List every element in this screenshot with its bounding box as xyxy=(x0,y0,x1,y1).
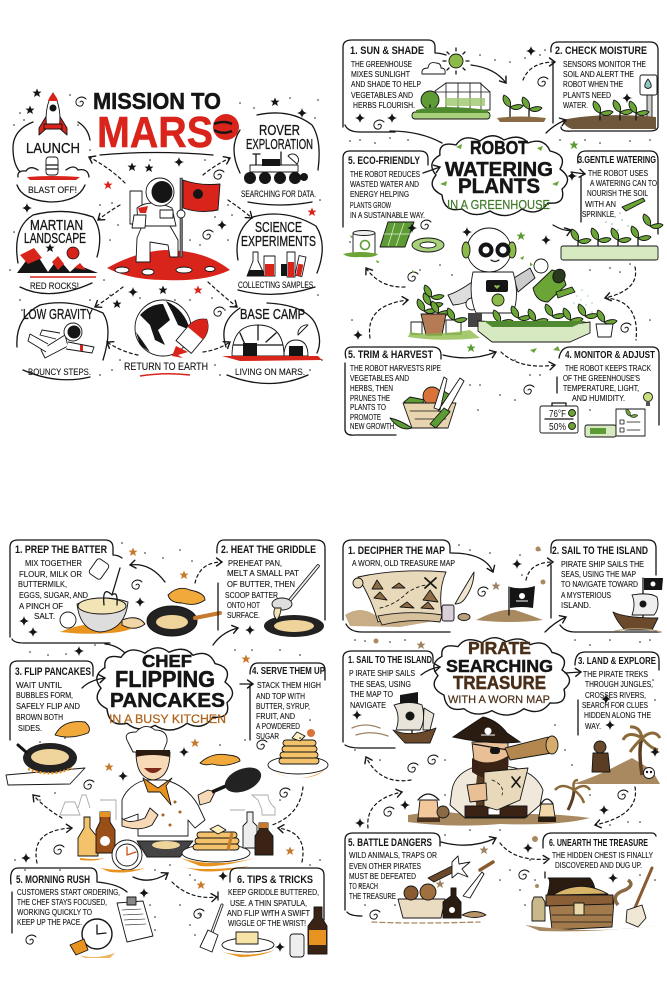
box: 2 heat the griddle: OF BUTTER, THEN xyxy=(227,579,295,589)
title: chef flipping pancakes xyxy=(97,648,233,730)
title: robot watering plants: IN A GREENHOUSE xyxy=(447,198,550,212)
box: 1 decipher the map: 1. DECIPHER THE MAP xyxy=(348,545,445,557)
box: 3 flip pancakes xyxy=(10,661,93,740)
box: 4 serve them up: FRUIT, AND xyxy=(256,711,295,721)
icon: battle items xyxy=(372,856,493,923)
box: 5 eco-friendly xyxy=(343,151,428,227)
icon: order clipboard and clock xyxy=(70,897,153,958)
label: low gravity: BOUNCY STEPS. xyxy=(28,367,91,378)
box: 4 serve them up: AND TOP WITH xyxy=(256,691,305,701)
icon: monitor devices xyxy=(540,392,652,437)
box: 2 sail to the island: TO NAVIGATE TOWARD xyxy=(561,579,638,589)
icon: dome base xyxy=(222,325,322,361)
box: 1 prep the batter: EGGS, SUGAR, AND xyxy=(19,590,88,600)
label: base camp: BASE CAMP xyxy=(240,307,305,323)
title: mission to mars: MISSION TO xyxy=(93,88,221,114)
label: launch: BLAST OFF! xyxy=(28,185,77,196)
box: 2 heat the griddle: ONTO HOT xyxy=(227,600,260,610)
title: chef flipping pancakes: FLIPPING xyxy=(115,666,215,692)
box: 3 land and explore: THE PIRATE TREKS xyxy=(583,669,648,679)
box: 2 check moisture: WATER. xyxy=(563,100,588,110)
title: chef flipping pancakes: IN A BUSY KITCHEN xyxy=(109,714,226,726)
box: 5 morning rush xyxy=(11,868,127,933)
box: 3 land and explore: HIDDEN ALONG THE xyxy=(584,710,651,720)
box: 1 sun and shade: HERBS FLOURISH. xyxy=(353,100,415,110)
arrows: pancake flow xyxy=(33,562,303,897)
icon: frying pan with pancake xyxy=(147,606,220,636)
box: 5 eco-friendly: PLANTS GROW xyxy=(350,200,391,210)
panel: pirate searching treasure xyxy=(343,540,663,931)
icon: eco items xyxy=(343,222,444,257)
box: 3 gentle watering xyxy=(578,151,658,234)
box: 1 sun and shade: THE GREENHOUSE xyxy=(351,59,412,69)
box: 5 battle dangers: 5. BATTLE DANGERS xyxy=(348,837,432,849)
box: 5 eco-friendly: 5. ECO-FRIENDLY xyxy=(348,155,420,167)
icon: red mountains xyxy=(17,247,98,277)
box: 3 flip pancakes: BUBBLES FORM, xyxy=(16,690,73,700)
icon: pirate ship top xyxy=(613,578,663,632)
label: rover exploration: SEARCHING FOR DATA. xyxy=(241,189,316,200)
box: 5 trim and harvest xyxy=(345,347,441,435)
box: 6 tips and tricks: 6. TIPS & TRICKS xyxy=(237,874,313,886)
box: 1 decipher the map: A WORN, OLD TREASURE MAP xyxy=(352,558,455,568)
box: 2 check moisture: SOIL AND ALERT THE xyxy=(563,69,634,79)
label: science experiments xyxy=(237,214,322,294)
box: 4 monitor and adjust: AND HUMIDITY. xyxy=(572,393,625,403)
box: 6 tips and tricks: KEEP GRIDDLE BUTTERED, xyxy=(228,887,319,897)
icon: rocket xyxy=(39,93,67,135)
icon: rover xyxy=(244,152,308,184)
box: 1 sail to the island: THE SEAS, USING xyxy=(350,679,411,689)
title: pirate searching treasure: TREASURE xyxy=(453,673,546,693)
icon: seedlings xyxy=(497,95,546,122)
box: 2 heat the griddle xyxy=(217,540,325,630)
title: pirate searching treasure: WITH A WORN MAP xyxy=(448,694,550,706)
box: 1 sun and shade: AND SHADE TO HELP xyxy=(351,79,421,89)
icon: potted plants xyxy=(408,285,617,340)
box: 5 eco-friendly: ENERGY HELPING xyxy=(350,189,409,199)
box: 1 sail to the island: THE MAP TO xyxy=(350,689,393,699)
icon: background bottles xyxy=(60,795,275,820)
panel: chef flipping pancakes xyxy=(6,540,328,958)
icon: treasure map xyxy=(345,571,474,627)
icon: harvest basket and shears xyxy=(390,377,464,429)
icon: top planter xyxy=(561,198,663,260)
box: 1 prep the batter: BUTTERMILK, xyxy=(18,579,67,589)
box: 4 monitor and adjust xyxy=(557,347,659,425)
icon: bottles and timer xyxy=(78,812,273,872)
box: 1 decipher the map xyxy=(343,540,455,632)
box: 2 heat the griddle: 2. HEAT THE GRIDDLE xyxy=(221,544,316,556)
icon: launch pad xyxy=(18,157,89,180)
label: launch xyxy=(13,122,90,202)
box: 2 heat the griddle: PREHEAT PAN, xyxy=(228,558,282,568)
box: 6 tips and tricks: WIGGLE OF THE WRIST! xyxy=(228,918,306,928)
box: 6 tips and tricks: AND FLIP WITH A SWIFT xyxy=(227,908,310,918)
box: 2 sail to the island: ISLAND. xyxy=(561,600,591,610)
box: 5 trim and harvest: 5. TRIM & HARVEST xyxy=(348,349,433,361)
box: 2 check moisture: 2. CHECK MOISTURE xyxy=(555,45,647,57)
box: 1 prep the batter: MIX TOGETHER xyxy=(25,558,82,568)
box: 5 battle dangers: THE TREASURE xyxy=(349,891,396,901)
title: robot watering plants: WATERING xyxy=(445,159,553,181)
box: 1 prep the batter: 1. PREP THE BATTER xyxy=(15,544,107,556)
box: 5 morning rush: CUSTOMERS START ORDERING, xyxy=(17,887,120,897)
icon: floating astronaut xyxy=(28,323,94,358)
box: 5 trim and harvest: HERBS, THEN xyxy=(350,383,393,393)
box: 3 flip pancakes: 3. FLIP PANCAKES xyxy=(15,666,91,678)
label: science experiments: COLLECTING SAMPLES. xyxy=(238,280,315,291)
box: 5 morning rush: 5. MORNING RUSH xyxy=(16,874,90,886)
icon: griddle and ladle xyxy=(264,566,324,637)
box: 3 flip pancakes: WAIT UNTIL xyxy=(16,680,62,690)
title: chef flipping pancakes: CHEF xyxy=(142,651,192,671)
box: 5 battle dangers xyxy=(345,833,440,916)
arrows: mars flow xyxy=(89,157,252,355)
box: 5 battle dangers: WILD ANIMALS, TRAPS OR xyxy=(349,850,437,860)
title: robot watering plants: ROBOT xyxy=(470,137,529,158)
title: pirate searching treasure: SEARCHING xyxy=(446,656,553,676)
box: 2 check moisture: ROBOT WHEN THE xyxy=(563,79,623,89)
box: 4 serve them up: 4. SERVE THEM UP xyxy=(252,665,325,677)
icon: pirate flag on beach xyxy=(476,586,543,622)
box: 6 tips and tricks xyxy=(218,868,324,928)
label: martian landscape: RED ROCKS! xyxy=(30,281,79,292)
box: 1 sun and shade: VEGETABLES AND xyxy=(351,90,413,100)
title: chef flipping pancakes: PANCAKES xyxy=(110,690,225,712)
box: 1 sail to the island: 1. SAIL TO THE ISLAND xyxy=(348,654,432,666)
label: launch: LAUNCH xyxy=(26,141,80,157)
box: 5 battle dangers: EVEN OTHER PIRATES xyxy=(349,861,421,871)
box: 4 serve them up: BUTTER, SYRUP, xyxy=(256,701,310,711)
box: 3 land and explore: WAY. xyxy=(585,721,601,731)
box: 2 check moisture xyxy=(551,42,658,131)
icon: griddle and pancake stack xyxy=(137,825,255,866)
title: robot watering plants xyxy=(432,136,568,216)
box: 6 unearth the treasure xyxy=(543,833,656,878)
icon: watering can xyxy=(533,267,592,314)
box: 1 sail to the island xyxy=(343,651,433,748)
box: 1 sail to the island: P IRATE SHIP SAILS xyxy=(349,668,415,678)
box: 1 sun and shade: 1. SUN & SHADE xyxy=(350,45,424,57)
box: 5 battle dangers: MUST BE DEFEATED xyxy=(349,871,416,881)
icon: chef xyxy=(122,726,215,836)
label: base camp: LIVING ON MARS. xyxy=(235,367,305,378)
title: pirate searching treasure xyxy=(434,638,570,715)
box: 5 morning rush: KEEP UP THE PACE. xyxy=(17,917,82,927)
title: robot watering plants: PLANTS xyxy=(458,175,540,198)
label: science experiments: EXPERIMENTS xyxy=(241,234,316,250)
box: 1 prep the batter xyxy=(10,540,128,656)
label: low gravity xyxy=(17,303,108,380)
box: 3 flip pancakes: SIDES. xyxy=(18,723,42,733)
icon: planet mars xyxy=(213,114,239,140)
box: 5 trim and harvest: VEGETABLES AND xyxy=(350,373,409,383)
box: 5 battle dangers: TO REACH xyxy=(349,881,378,891)
box: 5 eco-friendly: THE ROBOT REDUCES xyxy=(350,169,420,179)
title: mission to mars: MARS xyxy=(97,108,213,157)
box: 5 trim and harvest: NEW GROWTH. xyxy=(350,421,396,431)
box: 3 land and explore: SEARCH FOR CLUES xyxy=(582,700,648,710)
box: 1 sail to the island: NAVIGATE xyxy=(350,700,386,710)
box: 4 serve them up xyxy=(250,663,325,741)
icon: robot watering xyxy=(448,228,548,327)
box: 5 trim and harvest: THE ROBOT HARVESTS RIPE xyxy=(350,363,441,373)
label: martian landscape: LANDSCAPE xyxy=(24,231,86,247)
icon: stove pan xyxy=(6,722,89,785)
box: 6 unearth the treasure: DISCOVERED AND DUG UP. xyxy=(555,860,642,870)
box: 2 sail to the island: PIRATE SHIP SAILS THE xyxy=(561,559,644,569)
icon: pirate with spyglass xyxy=(408,717,590,826)
box: 1 sun and shade: MIXES SUNLIGHT xyxy=(351,69,410,79)
box: 4 serve them up: STACK THEM HIGH xyxy=(257,680,321,690)
label: base camp xyxy=(224,303,320,384)
decoration: robot sparkles xyxy=(350,46,650,410)
icon: earth and rocket xyxy=(124,300,214,376)
icon: science flasks xyxy=(247,252,306,277)
icon: astronaut with flag xyxy=(107,178,230,280)
box: 4 serve them up: A POWDERED xyxy=(256,721,300,731)
icon: island and explorer xyxy=(573,727,660,784)
box: 3 gentle watering: THE ROBOT USES xyxy=(588,168,648,178)
box: 6 tips and tricks: USE. A THIN SPATULA, xyxy=(230,898,307,908)
icon: pancake stack top right xyxy=(268,729,328,778)
box: 3 gentle watering: WITH AN xyxy=(585,199,616,209)
box: 5 trim and harvest: PRUNES THE xyxy=(350,393,390,403)
title: pirate searching treasure: PIRATE xyxy=(468,638,531,658)
box: 2 sail to the island: A MYSTERIOUS xyxy=(561,590,611,600)
decoration: pirate sparkles xyxy=(352,545,660,919)
icon: flying pancake xyxy=(168,588,205,604)
box: 3 flip pancakes: SAFELY FLIP AND xyxy=(16,701,80,711)
icon: pirate ship left xyxy=(352,692,436,743)
icon: treasure chest and shovel xyxy=(525,868,660,931)
box: 1 prep the batter: SALT. xyxy=(34,611,55,621)
icon: earth and rocket: RETURN TO EARTH xyxy=(124,361,208,373)
box: 5 eco-friendly: IN A SUSTAINABLE WAY. xyxy=(350,210,425,220)
icon: monitor devices: 76°F xyxy=(549,409,566,420)
box: 4 monitor and adjust: TEMPERATURE, LIGHT, xyxy=(563,383,639,393)
box: 2 check moisture: SENSORS MONITOR THE xyxy=(563,59,646,69)
label: martian landscape: MARTIAN xyxy=(30,218,83,234)
box: 3 land and explore xyxy=(575,652,659,735)
icon: mixing bowl and whisk xyxy=(60,558,145,634)
box: 5 eco-friendly: WASTED WATER AND xyxy=(350,179,419,189)
arrows: robot flow xyxy=(366,62,636,366)
label: rover exploration: EXPLORATION xyxy=(246,137,313,153)
icon: greenhouse xyxy=(412,83,490,119)
icon: lanterns and palm xyxy=(417,780,590,822)
icon: flipping pan xyxy=(200,754,265,797)
box: 2 heat the griddle: SCOOP BATTER xyxy=(225,590,278,600)
box: 1 prep the batter: A PINCH OF xyxy=(19,601,63,611)
box: 3 land and explore: CROSSES RIVERS, xyxy=(585,690,646,700)
decoration: mars stars xyxy=(10,88,322,375)
label: low gravity: LOW GRAVITY xyxy=(23,307,93,323)
label: rover exploration xyxy=(234,113,319,205)
label: science experiments: SCIENCE xyxy=(255,220,302,236)
label: rover exploration: ROVER xyxy=(259,123,300,139)
decoration: pancake sparkles xyxy=(15,543,320,952)
panel: robot watering plants xyxy=(343,40,663,437)
title: mission to mars xyxy=(93,88,221,157)
box: 4 serve them up: SUGAR xyxy=(256,731,279,741)
icon: spatula, butter and bottles xyxy=(200,905,327,957)
box: 2 sail to the island xyxy=(551,540,661,632)
box: 2 heat the griddle: MELT A SMALL PAT xyxy=(227,568,299,578)
arrows: pirate flow xyxy=(366,553,636,859)
box: 4 monitor and adjust: OF THE GREENHOUSE'S xyxy=(563,373,640,383)
icon: sun and cloud xyxy=(422,48,469,74)
box: 2 sail to the island: SEAS, USING THE MAP xyxy=(561,569,636,579)
box: 3 flip pancakes: BROWN BOTH xyxy=(16,712,63,722)
icon: planting tray xyxy=(478,304,598,342)
box: 5 trim and harvest: PLANTS TO xyxy=(350,402,386,412)
box: 5 morning rush: THE CHEF STAYS FOCUSED, xyxy=(17,897,107,907)
box: 3 gentle watering: NOURISH THE SOIL xyxy=(587,188,648,198)
icon: monitor devices: 50% xyxy=(549,422,566,433)
box: 5 morning rush: WORKING QUICKLY TO xyxy=(17,907,92,917)
label: martian landscape xyxy=(17,211,100,294)
box: 3 gentle watering: SPRINKLE. xyxy=(582,209,616,219)
box: 2 check moisture: PLANTS NEED xyxy=(563,90,611,100)
box: 1 prep the batter: FLOUR, MILK OR xyxy=(19,569,82,579)
panel: mission to mars xyxy=(10,88,322,384)
box: 1 sun and shade xyxy=(343,40,446,143)
box: 5 trim and harvest: PROMOTE xyxy=(350,412,381,422)
box: 2 heat the griddle: SURFACE. xyxy=(227,610,260,620)
icon: moisture sensor and soil xyxy=(562,75,657,129)
